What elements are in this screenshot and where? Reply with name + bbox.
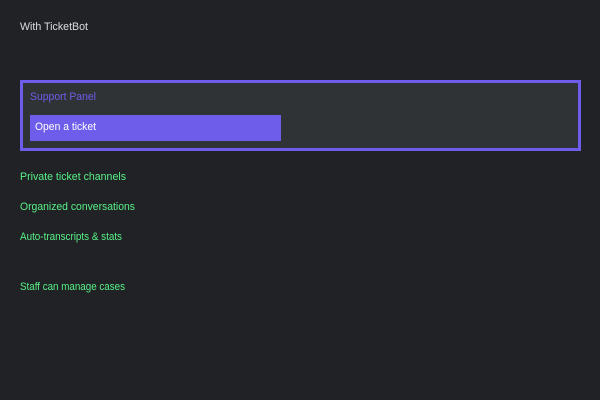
feature: staff can manage cases: Staff can manage cases — [20, 281, 125, 293]
panel background — [22, 82, 580, 150]
feature: organized conversations: Organized conversations — [20, 201, 135, 213]
title: With TicketBot — [20, 21, 88, 33]
button: open a ticket: Open a ticket — [35, 121, 96, 133]
panel: support panel — [22, 82, 580, 150]
feature: private ticket channels: Private ticket channels — [20, 171, 126, 183]
panel heading: Support Panel — [30, 91, 96, 103]
button: open a ticket — [30, 115, 281, 141]
feature: auto-transcripts and stats: Auto-transcripts & stats — [20, 231, 122, 243]
